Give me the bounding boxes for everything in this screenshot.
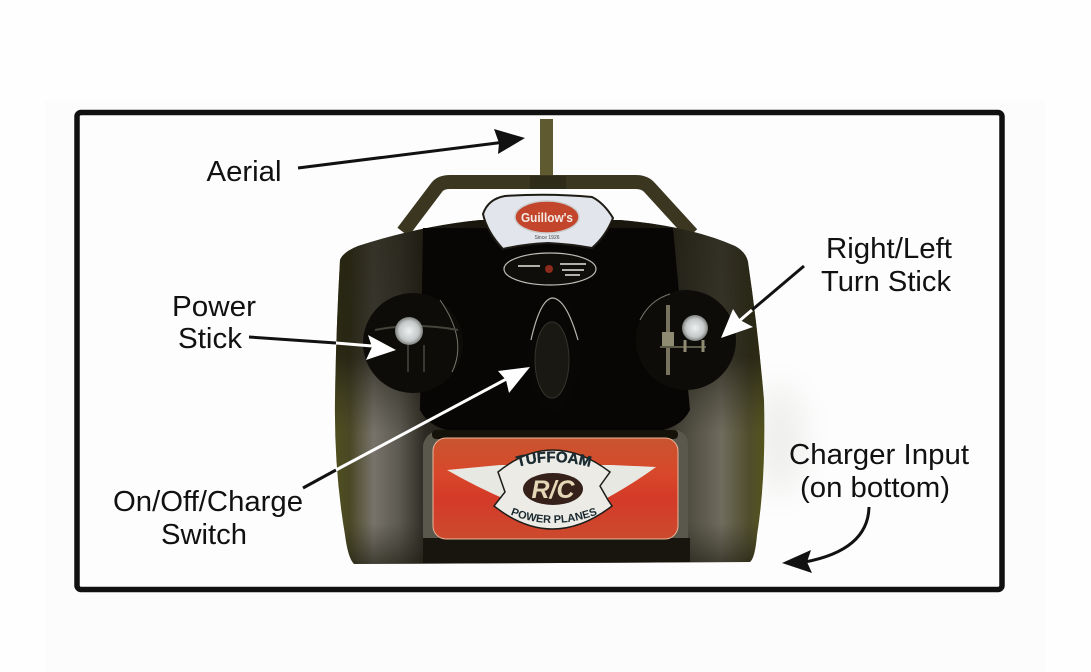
drop shadow beside case	[758, 385, 802, 495]
centre badge	[494, 450, 612, 529]
on/off/charge switch	[528, 297, 580, 411]
arrow: right/left turn stick	[721, 266, 804, 338]
aerial	[540, 119, 553, 179]
dark centre of case	[420, 228, 690, 432]
label: Right/Left Turn Stick: Turn Stick	[821, 266, 952, 298]
grey surround of plate	[423, 430, 688, 545]
carrying handle	[403, 182, 692, 234]
dark band over plate	[432, 430, 678, 439]
arrow: aerial	[298, 129, 525, 168]
logo plate	[432, 438, 678, 540]
brand badge	[483, 195, 613, 249]
label: On/Off/Charge Switch: On/Off/Charge	[113, 486, 303, 518]
label: Power Stick: Stick	[178, 323, 243, 355]
logo plate: POWER PLANES	[511, 508, 596, 523]
label: Charger Input (on bottom): Charger Input	[789, 439, 969, 471]
brand badge: Since 1926	[534, 235, 560, 241]
power stick gimbal	[363, 293, 463, 393]
label: Power Stick: Power	[172, 291, 256, 323]
arrow: on/off/charge switch	[303, 367, 530, 488]
arrow: charger input	[782, 507, 869, 573]
label: Charger Input (on bottom): (on bottom)	[800, 472, 950, 504]
logo plate: TUFFOAM	[515, 452, 592, 467]
dark band under plate	[423, 538, 690, 563]
panel: frame	[77, 112, 1002, 590]
aerial collar	[530, 176, 566, 189]
case body	[335, 220, 764, 564]
label: Right/Left Turn Stick: Right/Left	[826, 233, 952, 265]
brand badge: Guillow's	[521, 210, 573, 225]
icon: transmitter	[334, 119, 764, 564]
indicator light	[504, 253, 596, 285]
label: On/Off/Charge Switch: Switch	[161, 519, 247, 551]
wings	[447, 465, 656, 504]
arrow: power stick	[249, 335, 396, 360]
logo plate: R/C	[531, 476, 575, 504]
label: Aerial: Aerial	[206, 156, 282, 188]
turn stick gimbal	[636, 290, 736, 390]
